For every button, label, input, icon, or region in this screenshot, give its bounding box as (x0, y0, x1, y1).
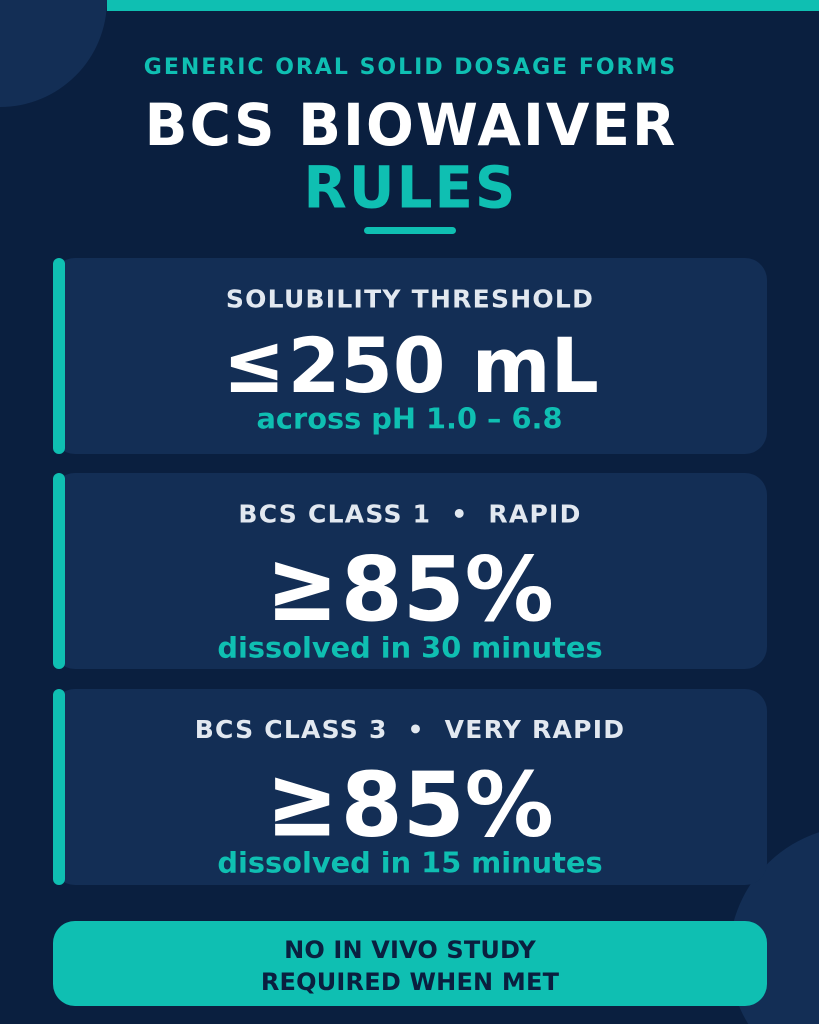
panel: solubility threshold (53, 258, 767, 454)
accent bar: solubility (53, 258, 65, 454)
label: class 3 very rapid: BCS CLASS 3 • VERY RAPID (195, 715, 625, 744)
value: 85 percent: 85% (341, 752, 554, 856)
title (145, 92, 677, 222)
decorative circle: bottom right (729, 832, 819, 1024)
callout: no in vivo study (53, 921, 767, 1006)
value: 85 percent (266, 742, 554, 859)
value: 85 percent: ≥ (266, 742, 338, 859)
value: 85 percent: ≥ (266, 527, 338, 644)
eyebrow heading: GENERIC ORAL SOLID DOSAGE FORMS (144, 55, 677, 80)
value: 250 mL: 250 mL (288, 322, 599, 410)
note: 15 minutes: dissolved in 15 minutes (217, 846, 603, 880)
value: 85 percent: 85% (341, 537, 554, 641)
decorative circle: top left (0, 0, 107, 107)
title: RULES (304, 155, 517, 222)
top accent bar (107, 0, 819, 11)
note: pH range: across pH 1.0 – 6.8 (256, 402, 563, 436)
label: solubility threshold: SOLUBILITY THRESHOLD (226, 284, 594, 314)
title: BCS BIOWAIVER (145, 92, 677, 159)
panel: BCS class 3 (53, 689, 767, 885)
accent bar: class 1 (53, 473, 65, 669)
note: 30 minutes: dissolved in 30 minutes (217, 630, 603, 664)
title underline (364, 227, 456, 234)
callout: no in vivo study: NO IN VIVO STUDY (284, 936, 536, 964)
panel: BCS class 1 (53, 473, 767, 669)
label: class 1 rapid: BCS CLASS 1 • RAPID (238, 500, 582, 528)
value: 250 mL: ≤ (223, 315, 285, 412)
accent bar: class 3 (53, 689, 65, 885)
value: 85 percent (266, 527, 554, 644)
callout: no in vivo study: REQUIRED WHEN MET (261, 968, 560, 996)
